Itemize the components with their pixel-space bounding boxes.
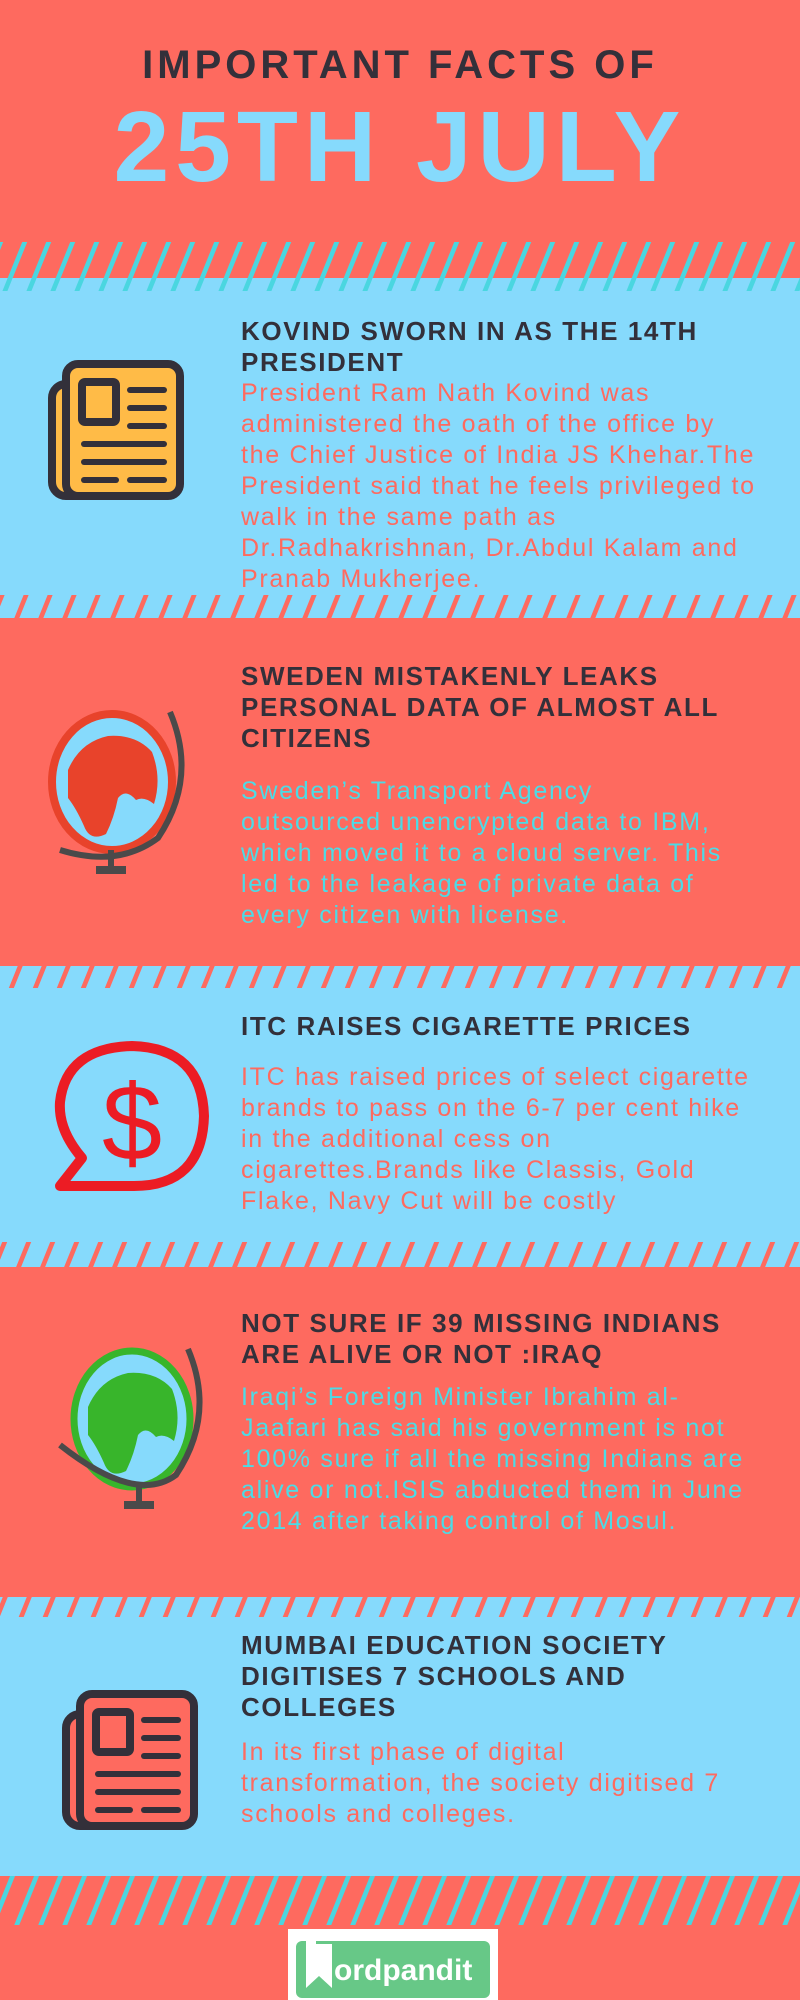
icon: newspaper red (62, 1690, 198, 1830)
icon: dollar speech bubble (54, 1041, 209, 1191)
body text: Flake, Navy Cut will be costly (241, 1187, 617, 1215)
heading: MUMBAI EDUCATION SOCIETY (241, 1630, 667, 1660)
body text (241, 1738, 720, 1828)
title: 25TH JULY (114, 91, 686, 203)
body text: President Ram Nath Kovind was (241, 379, 650, 407)
heading: COLLEGES (241, 1692, 397, 1722)
body text: in the additional cess on (241, 1125, 552, 1153)
heading: SWEDEN MISTAKENLY LEAKS (241, 661, 659, 691)
body text (241, 1063, 750, 1215)
body text: Dr.Radhakrishnan, Dr.Abdul Kalam and (241, 534, 739, 562)
body text: In its first phase of digital (241, 1738, 565, 1766)
icon: dollar speech bubble: $ (102, 1062, 162, 1183)
panel: Sweden (48, 661, 722, 929)
heading (241, 1308, 721, 1369)
logo: wordpandit: ordpandit (334, 1954, 472, 1987)
body text: walk in the same path as (241, 503, 557, 531)
heading (241, 1630, 667, 1722)
body text: Jaafari has said his government is not (241, 1414, 725, 1442)
heading: KOVIND SWORN IN AS THE 14TH (241, 316, 698, 346)
body text: Pranab Mukherjee. (241, 565, 481, 593)
heading: ITC RAISES CIGARETTE PRICES (241, 1011, 692, 1041)
body text: 2014 after taking control of Mosul. (241, 1507, 677, 1535)
body text: which moved it to a cloud server. This (241, 839, 722, 867)
heading (241, 316, 698, 377)
body text: outsourced unencrypted data to IBM, (241, 808, 710, 836)
body text: alive or not.ISIS abducted them in June (241, 1476, 744, 1504)
body text (241, 379, 756, 593)
icon: globe red (48, 710, 185, 874)
heading: ARE ALIVE OR NOT :IRAQ (241, 1339, 603, 1369)
panel: Mumbai (62, 1630, 720, 1830)
title: IMPORTANT FACTS OF (142, 43, 658, 87)
heading: PERSONAL DATA OF ALMOST ALL (241, 692, 719, 722)
panel: ITC (54, 1011, 750, 1215)
body text (241, 1383, 744, 1535)
body text: administered the oath of the office by (241, 410, 715, 438)
body text (241, 777, 722, 929)
body text: the Chief Justice of India JS Khehar.The (241, 441, 755, 469)
body text: led to the leakage of private data of (241, 870, 694, 898)
logo: wordpandit (288, 1929, 498, 2000)
body text: every citizen with license. (241, 901, 569, 929)
heading: PRESIDENT (241, 347, 404, 377)
body text: Iraqi’s Foreign Minister Ibrahim al- (241, 1383, 680, 1411)
heading: DIGITISES 7 SCHOOLS AND (241, 1661, 626, 1691)
body text: President said that he feels privileged to (241, 472, 756, 500)
body text: schools and colleges. (241, 1800, 516, 1828)
icon: newspaper yellow (48, 360, 184, 500)
body text: transformation, the society digitised 7 (241, 1769, 720, 1797)
body text: Sweden’s Transport Agency (241, 777, 593, 805)
body text: cigarettes.Brands like Classis, Gold (241, 1156, 695, 1184)
heading (241, 661, 719, 753)
body text: 100% sure if all the missing Indians are (241, 1445, 744, 1473)
panel: Kovind (48, 316, 756, 593)
heading: CITIZENS (241, 723, 372, 753)
body text: brands to pass on the 6-7 per cent hike (241, 1094, 741, 1122)
icon: globe green (58, 1348, 203, 1509)
body text: ITC has raised prices of select cigarette (241, 1063, 750, 1091)
panel: Iraq (58, 1308, 744, 1535)
heading: NOT SURE IF 39 MISSING INDIANS (241, 1308, 721, 1338)
